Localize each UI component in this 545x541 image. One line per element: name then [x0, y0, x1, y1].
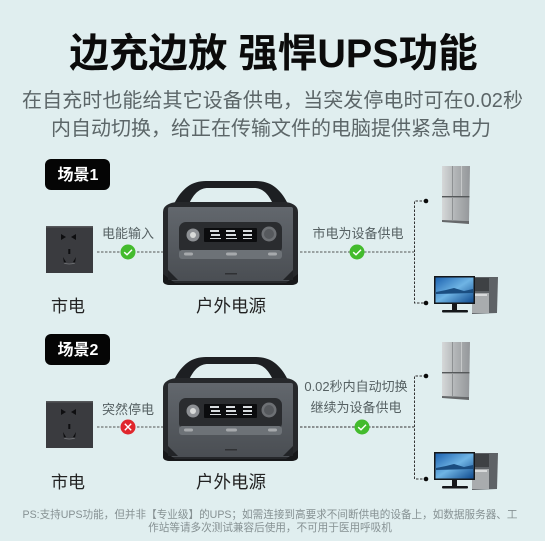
- panel: scenario 2: [45, 334, 498, 492]
- icon: computer: [434, 276, 498, 314]
- footnote: PS:支持UPS功能，但并非【专业级】的UPS；如需连接到高要求不间断供电的设备上，如数据服务器、工: [23, 508, 518, 521]
- badge: scenario 1: 场景1: [58, 166, 99, 184]
- footnote: 作站等请多次测试兼容后使用，不可用于医用呼吸机: [148, 521, 392, 534]
- icon: wall socket: [46, 226, 93, 273]
- branch connector: [414, 374, 428, 481]
- power station: [163, 181, 298, 285]
- interrupted connection: 突然停电: [102, 402, 154, 417]
- label: mains: 市电: [51, 473, 85, 492]
- output connection: [300, 379, 414, 434]
- badge: scenario 1: [45, 159, 110, 190]
- output connection: 市电为设备供电: [312, 226, 404, 241]
- badge: scenario 2: 场景2: [58, 341, 99, 359]
- label: mains: 市电: [51, 297, 85, 316]
- power station: [163, 357, 298, 461]
- panel: scenario 1: [45, 159, 498, 316]
- output connection: 继续为设备供电: [310, 400, 402, 415]
- output connection: 0.02秒内自动切换: [304, 379, 408, 394]
- icon: computer: [434, 452, 498, 490]
- subtitle: 内自动切换，给正在传输文件的电脑提供紧急电力: [51, 117, 491, 140]
- interrupted connection: [97, 402, 163, 434]
- label: power station: 户外电源: [196, 472, 266, 492]
- input connection: 电能输入: [102, 226, 154, 241]
- subtitle: [22, 89, 523, 140]
- output connection: [300, 226, 414, 260]
- subtitle: 在自充时也能给其它设备供电，当突发停电时可在0.02秒: [22, 89, 523, 112]
- icon: wall socket: [46, 401, 93, 448]
- input connection: [97, 226, 163, 260]
- title: 边充边放 强悍UPS功能: [69, 32, 478, 76]
- icon: fridge: [442, 166, 470, 224]
- icon: fridge: [442, 342, 470, 400]
- label: power station: 户外电源: [196, 296, 266, 316]
- badge: scenario 2: [45, 334, 110, 365]
- branch connector: [414, 199, 428, 305]
- footnote: [23, 508, 518, 534]
